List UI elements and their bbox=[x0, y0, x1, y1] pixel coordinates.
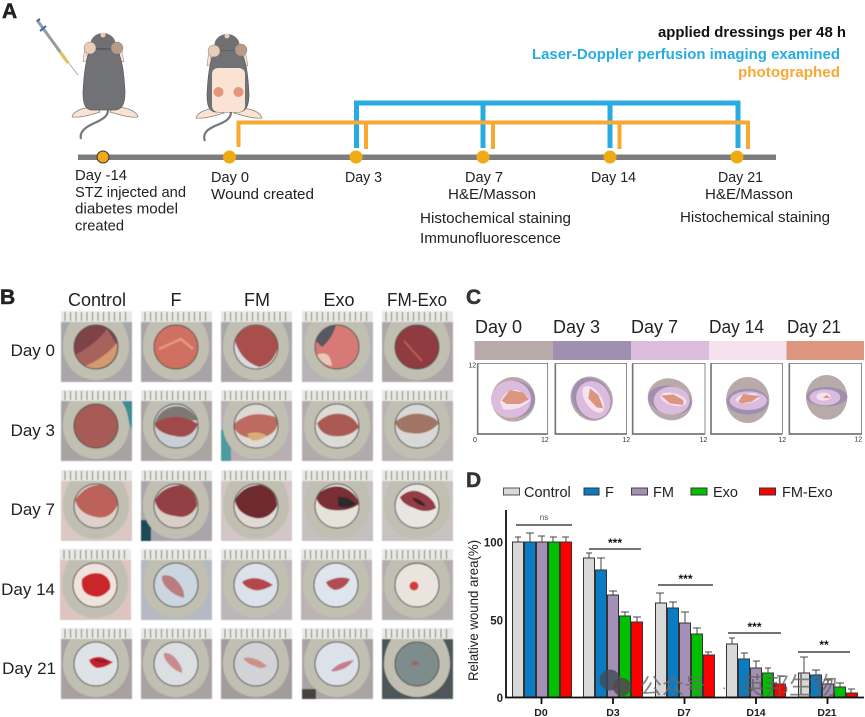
photo: FM-Exo Day 3 bbox=[382, 390, 453, 461]
photo: F Day 3 bbox=[141, 390, 212, 461]
bars: D7 bbox=[656, 603, 714, 697]
day labels: Day 21 bbox=[787, 317, 841, 337]
column headers: Exo bbox=[323, 290, 355, 310]
bars: D14 bbox=[726, 644, 786, 697]
day labels: Day 14 bbox=[709, 317, 764, 337]
photo: Control Day 21 bbox=[61, 628, 132, 699]
trace plot Day 7 bbox=[633, 363, 708, 444]
photo: F Day 14 bbox=[141, 549, 212, 620]
panel A: experimental timeline bbox=[2, 0, 846, 247]
trace plot Day 14: 12 bbox=[778, 437, 786, 444]
y axis tick labels: 100 bbox=[484, 538, 503, 550]
trace plot Day 21: 12 bbox=[854, 436, 862, 443]
x axis ticks and labels bbox=[534, 697, 837, 717]
timeline labels: Day 3 bbox=[345, 169, 382, 186]
column headers bbox=[68, 290, 447, 310]
panel letter C: C bbox=[466, 286, 481, 309]
timeline labels: Day -14 bbox=[75, 167, 127, 184]
chart legend bbox=[504, 485, 833, 501]
photo: Control Day 0 bbox=[61, 311, 132, 382]
panel letter A: A bbox=[2, 0, 17, 23]
panel C: wound closure traces bbox=[466, 286, 864, 444]
significance brackets: *** bbox=[608, 536, 622, 550]
timeline axis bbox=[78, 154, 776, 160]
photo: Exo Day 0 bbox=[302, 311, 373, 382]
timeline labels: created bbox=[75, 218, 124, 234]
photo: FM Day 14 bbox=[221, 549, 292, 620]
legend: laser doppler: Laser-Doppler perfusion imaging examined bbox=[532, 46, 840, 63]
day labels bbox=[475, 317, 841, 337]
chart legend: Control bbox=[524, 485, 571, 501]
day labels: Day 3 bbox=[553, 317, 600, 337]
watermark: · bbox=[722, 679, 727, 695]
trace plot Day 21 bbox=[789, 363, 862, 443]
photo: Control Day 7 bbox=[61, 470, 132, 541]
bars: D0 bbox=[512, 542, 572, 697]
photo: FM-Exo Day 7 bbox=[382, 470, 453, 541]
chart legend: FM bbox=[653, 485, 674, 501]
timeline labels: Day 0 bbox=[211, 169, 249, 186]
trace plots bbox=[468, 362, 862, 444]
blue Laser-Doppler bracket bbox=[356, 103, 738, 148]
photo: FM Day 3 bbox=[221, 390, 292, 461]
photo: Control Day 3 bbox=[61, 390, 132, 461]
photo: FM Day 21 bbox=[221, 628, 292, 699]
row headers: Day 14 bbox=[1, 580, 55, 599]
timeline labels: Wound created bbox=[211, 186, 314, 203]
colour key bar bbox=[474, 341, 864, 360]
legend: photographed: photographed bbox=[738, 64, 840, 81]
photo: FM-Exo Day 0 bbox=[382, 311, 453, 382]
photo: Exo Day 14 bbox=[301, 549, 372, 620]
trace plot Day 0 bbox=[468, 362, 549, 444]
orange photography bracket bbox=[238, 122, 748, 149]
legend: applied dressings: applied dressings per 48 h bbox=[658, 24, 846, 41]
bars: D3 bbox=[584, 558, 642, 697]
timeline labels: Day 14 bbox=[591, 169, 636, 186]
y axis tick labels: 0 bbox=[497, 693, 503, 705]
timeline labels: Histochemical staining bbox=[680, 209, 830, 226]
row headers: Day 0 bbox=[11, 341, 55, 360]
trace plot Day 14 bbox=[711, 363, 786, 444]
icon: mouse with two wounds bbox=[196, 34, 262, 141]
row headers: Day 21 bbox=[2, 659, 56, 678]
error bars bbox=[515, 533, 855, 693]
column headers: F bbox=[170, 290, 182, 310]
significance brackets: *** bbox=[747, 620, 762, 634]
day labels: Day 0 bbox=[475, 317, 522, 337]
icon: syringe bbox=[37, 19, 78, 75]
panel letter D: D bbox=[466, 469, 481, 492]
row headers: Day 3 bbox=[11, 421, 55, 440]
photo: Exo Day 7 bbox=[302, 470, 373, 541]
photo: FM Day 0 bbox=[221, 311, 292, 382]
photo: Control Day 14 bbox=[60, 549, 131, 620]
timeline labels: Immunofluorescence bbox=[420, 230, 561, 247]
photo: FM-Exo Day 14 bbox=[382, 549, 453, 620]
row headers bbox=[1, 341, 56, 678]
significance brackets: ns bbox=[540, 513, 548, 522]
photo: Exo Day 21 bbox=[302, 628, 373, 699]
panel D: bar chart of relative wound area bbox=[465, 469, 864, 717]
photo: F Day 7 bbox=[141, 470, 212, 541]
watermark: 英邦生物 bbox=[741, 673, 837, 700]
timeline labels: Day 7 bbox=[465, 169, 503, 186]
watermark bbox=[600, 670, 837, 700]
timeline labels: H&E/Masson bbox=[705, 186, 793, 203]
trace plot Day 0: 12 bbox=[468, 362, 476, 369]
photo: F Day 21 bbox=[141, 628, 212, 699]
timeline labels: H&E/Masson bbox=[448, 186, 536, 203]
timeline labels: Day 21 bbox=[718, 169, 763, 186]
icon: mouse with STZ injection bbox=[72, 32, 138, 139]
column headers: FM bbox=[244, 290, 270, 310]
significance brackets: ** bbox=[819, 638, 829, 652]
trace plot Day 0: 0 bbox=[473, 437, 477, 444]
panel letter B: B bbox=[0, 286, 15, 309]
timeline labels: Histochemical staining bbox=[420, 210, 571, 227]
significance brackets bbox=[516, 513, 850, 652]
trace plot Day 3 bbox=[555, 363, 630, 444]
chart legend: FM-Exo bbox=[782, 485, 833, 501]
axes bbox=[506, 510, 864, 698]
timeline labels: diabetes model bbox=[75, 200, 178, 218]
timeline markers bbox=[97, 150, 744, 164]
photo: FM-Exo Day 21 bbox=[382, 628, 453, 699]
y axis tick labels bbox=[484, 538, 503, 705]
column headers: FM-Exo bbox=[387, 290, 447, 310]
row headers: Day 7 bbox=[11, 500, 55, 519]
column headers: Control bbox=[68, 290, 126, 310]
bars: D21 bbox=[798, 673, 858, 697]
timeline labels: STZ injected and bbox=[75, 184, 186, 201]
y axis tick labels: 50 bbox=[490, 616, 503, 628]
photo: Exo Day 3 bbox=[302, 390, 373, 461]
photo: FM Day 7 bbox=[221, 470, 292, 541]
y axis title: Relative wound area(%) bbox=[465, 540, 481, 681]
chart legend: F bbox=[605, 485, 614, 501]
photo: F Day 0 bbox=[141, 311, 212, 382]
chart legend: Exo bbox=[713, 485, 738, 501]
trace plot Day 0: 12 bbox=[541, 437, 549, 444]
trace plot Day 7: 12 bbox=[700, 437, 708, 444]
panel B: wound photograph grid bbox=[0, 286, 453, 699]
day labels: Day 7 bbox=[631, 317, 678, 337]
watermark: 公众号 bbox=[640, 674, 706, 699]
trace plot Day 3: 12 bbox=[622, 437, 630, 444]
significance brackets: *** bbox=[678, 572, 693, 586]
timeline labels bbox=[75, 167, 830, 247]
